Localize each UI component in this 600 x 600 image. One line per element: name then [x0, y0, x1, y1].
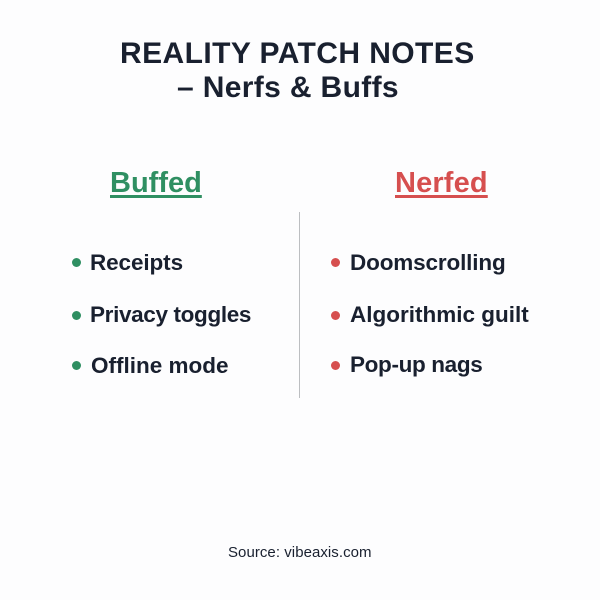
heading: Buffed: Buffed — [110, 167, 202, 199]
title: – Nerfs & Buffs — [177, 71, 399, 104]
heading: Nerfed: Nerfed — [395, 167, 488, 199]
item: Algorithmic guilt: Algorithmic guilt — [350, 302, 529, 327]
item: Offline mode: Offline mode — [91, 353, 229, 378]
item: Receipts: Receipts — [90, 250, 183, 275]
title — [120, 37, 475, 104]
item: Pop-up nags: Pop-up nags — [350, 352, 482, 377]
item: Privacy toggles: Privacy toggles — [90, 302, 251, 327]
list: nerfed items — [331, 250, 529, 377]
title: REALITY PATCH NOTES — [120, 37, 475, 70]
column divider — [299, 212, 300, 398]
source note: Source: vibeaxis.com — [228, 544, 372, 561]
list: buffed items — [72, 250, 251, 378]
item: Doomscrolling: Doomscrolling — [350, 250, 506, 275]
